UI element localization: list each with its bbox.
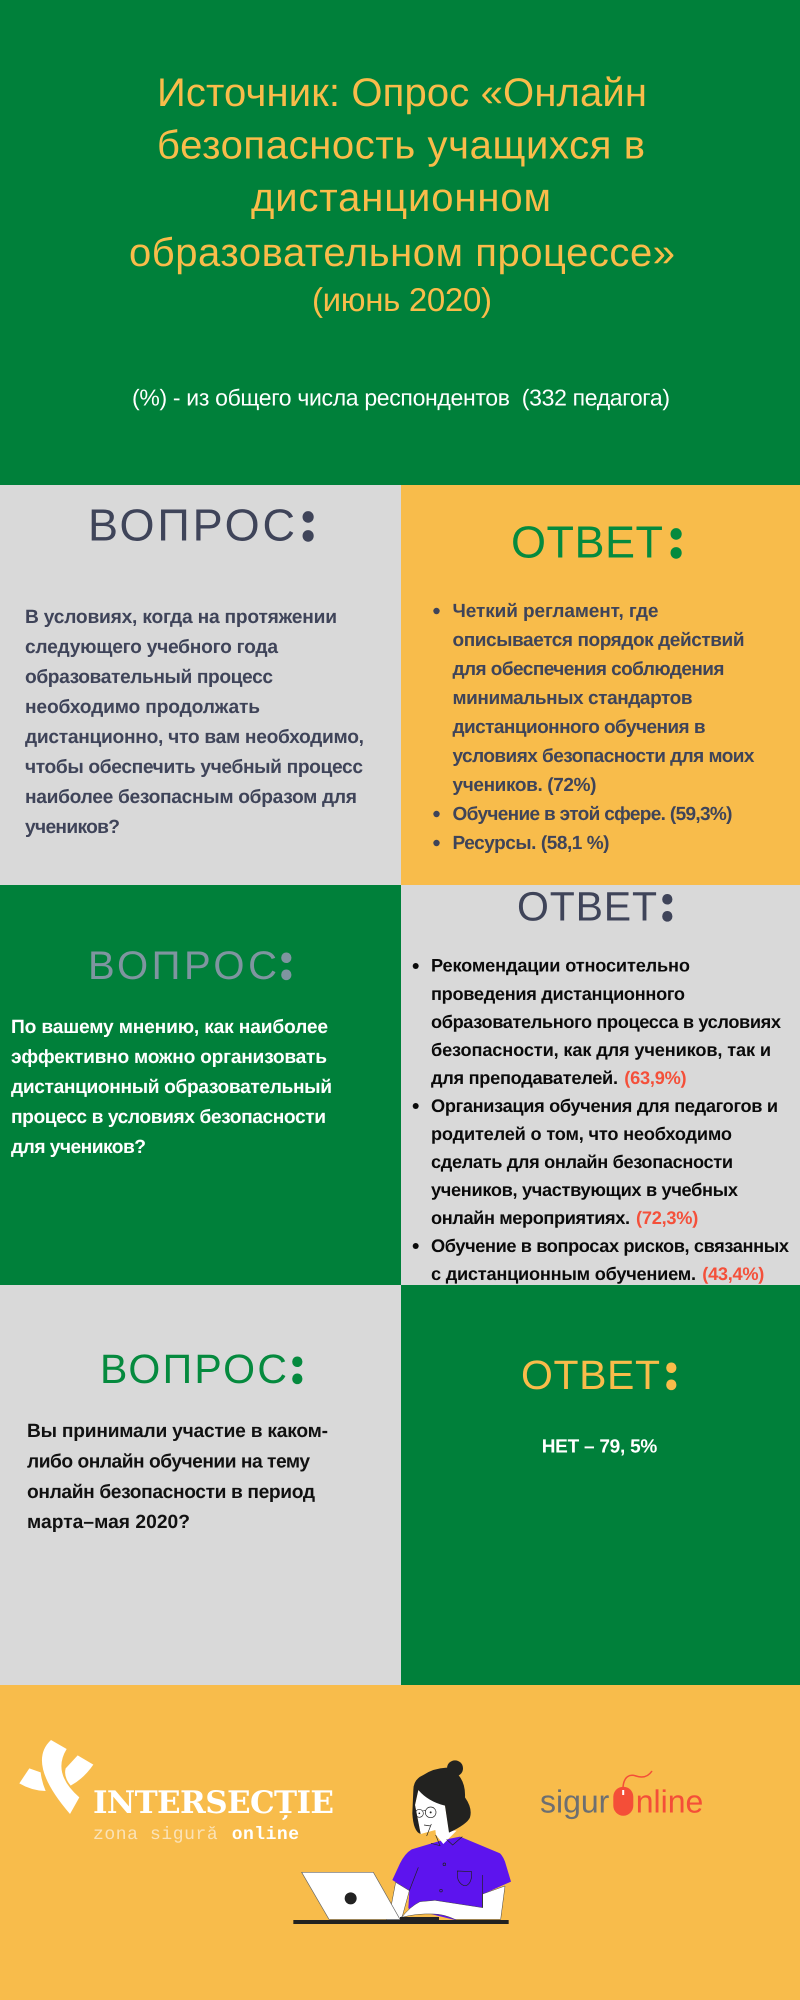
list: answer 1: минимальных стандартов — [452, 688, 692, 709]
list: answer 2: (72,3%) — [636, 1208, 698, 1228]
subtitle: respondents note: (%) - из общего числа респондентов (332 педагога) — [132, 384, 670, 410]
list: answer 2: учеников, участвующих в учебных — [431, 1180, 738, 1200]
title: (июнь 2020) — [312, 281, 492, 318]
panel: question 3 — [0, 1285, 401, 1685]
heading: question 1: : — [300, 483, 316, 555]
logo: Intersecție — [19, 1740, 334, 1845]
list: answer 2: Обучение в вопросах рисков, связанных — [431, 1236, 789, 1256]
list: answer 2: для преподавателей. — [431, 1068, 618, 1088]
heading: question 2 — [88, 926, 294, 992]
text: question 3 body: Вы принимали участие в каком- — [27, 1421, 328, 1442]
heading: question 1 — [88, 483, 316, 555]
list: answer 1: Ресурсы. (58,1 %) — [452, 833, 610, 854]
heading: answer 1: ОТВЕТ — [511, 517, 663, 568]
list: answer 1: Четкий регламент, где — [452, 601, 658, 622]
list: answer 2: Организация обучения для педагогов и — [431, 1096, 778, 1116]
text: question 3 body: онлайн безопасности в период — [27, 1482, 315, 1503]
shirt — [392, 1837, 511, 1920]
text: question 2 body — [11, 1017, 332, 1158]
text: question 1 body: В условиях, когда на протяжении — [25, 607, 337, 628]
glasses and details — [409, 1807, 482, 1908]
list: answer 1: условиях безопасности для моих — [452, 746, 755, 767]
text: question 3 body: либо онлайн обучении на тему — [27, 1452, 310, 1473]
text: question 1 body: учеников? — [25, 817, 120, 838]
text: question 2 body: эффективно можно организовать — [11, 1047, 327, 1068]
logo tagline: zona sigură — [93, 1825, 218, 1845]
text: question 2 body: По вашему мнению, как наиболее — [11, 1017, 328, 1038]
header panel — [0, 0, 800, 485]
heading: question 3 — [100, 1330, 305, 1396]
icon: Intersecție mark — [19, 1740, 93, 1814]
list: answer 1: описывается порядок действий — [452, 630, 744, 651]
list: answer 2: родителей о том, что необходимо — [431, 1124, 732, 1144]
text: answer 3 body: НЕТ – 79, 5% — [542, 1437, 657, 1458]
title: дистанционном — [251, 176, 551, 220]
table — [293, 1920, 509, 1924]
title — [129, 71, 675, 318]
text: question 2 body: для учеников? — [11, 1137, 146, 1158]
list: answer 2: онлайн мероприятиях. — [431, 1208, 630, 1228]
heading: answer 2 — [517, 868, 675, 933]
text: question 2 body: дистанционный образовательный — [11, 1077, 332, 1098]
title: Источник: Опрос «Онлайн — [157, 71, 647, 115]
logo tagline: online — [232, 1825, 299, 1845]
list: answer 2 — [413, 956, 789, 1284]
text: question 1 body: образовательный процесс — [25, 667, 273, 688]
laptop — [302, 1872, 439, 1920]
list: answer 2: (43,4%) — [702, 1264, 764, 1284]
logo: sigurOnline — [540, 1771, 703, 1820]
list: answer 1 — [433, 601, 755, 854]
heading: question 2: ВОПРОС — [88, 944, 277, 988]
logo text: sigur: sigur — [540, 1784, 610, 1820]
logo wordmark: INTERSECȚIE — [93, 1785, 334, 1821]
list: answer 2: с дистанционным обучением. — [431, 1264, 696, 1284]
list: answer 2: безопасности, как для учеников, так и — [431, 1040, 771, 1060]
title: образовательном процессе» — [129, 231, 675, 275]
text: question 1 body: наиболее безопасным образом для — [25, 787, 357, 808]
heading: answer 1 — [511, 500, 684, 572]
text: question 3 body — [27, 1421, 328, 1533]
panel: question 2 — [0, 885, 401, 1285]
heading: answer 2: ОТВЕТ — [517, 884, 657, 930]
text: question 3 body: марта–мая 2020? — [27, 1512, 190, 1533]
panel: answer 3 — [401, 1285, 800, 1685]
logo text: nline: nline — [636, 1784, 703, 1820]
heading: answer 3 — [521, 1336, 679, 1402]
list: answer 2: образовательного процесса в условиях — [431, 1012, 781, 1032]
text: question 1 body: чтобы обеспечить учебный процесс — [25, 757, 363, 778]
list: answer 1: дистанционного обучения в — [452, 717, 706, 738]
heading: answer 3: : — [664, 1336, 679, 1402]
list: answer 1: Обучение в этой сфере. (59,3%) — [452, 804, 732, 825]
hair — [412, 1760, 471, 1834]
list: answer 1: учеников. (72%) — [452, 775, 596, 796]
list: answer 2: Рекомендации относительно — [431, 956, 690, 976]
neck and face — [415, 1790, 457, 1844]
heading: answer 2: : — [660, 868, 675, 933]
arms — [387, 1882, 505, 1920]
text: question 2 body: процесс в условиях безопасности — [11, 1107, 326, 1128]
panel: answer 2 — [401, 868, 800, 1285]
heading: question 2: : — [279, 926, 294, 992]
heading: answer 3: ОТВЕТ — [521, 1352, 660, 1398]
icon: computer mouse — [613, 1771, 652, 1816]
text: question 1 body: следующего учебного года — [25, 637, 278, 658]
list: answer 1: для обеспечения соблюдения — [452, 659, 724, 680]
title: безопасность учащихся в — [157, 124, 645, 168]
logo tagline — [93, 1825, 299, 1845]
panel: question 1 — [0, 483, 401, 885]
text: question 1 body: необходимо продолжать — [25, 697, 260, 718]
text: question 1 body: дистанционно, что вам необходимо, — [25, 727, 364, 748]
heading: question 3: : — [290, 1330, 305, 1396]
panel: answer 1 — [401, 485, 800, 885]
list: answer 2: (63,9%) — [624, 1068, 687, 1088]
illustration: woman at laptop — [293, 1760, 511, 1924]
text: question 1 body — [25, 607, 364, 838]
heading: question 1: ВОПРОС — [88, 500, 295, 551]
list: answer 2: проведения дистанционного — [431, 984, 685, 1004]
list: answer 2: сделать для онлайн безопасности — [431, 1152, 733, 1172]
heading: answer 1: : — [668, 500, 684, 572]
heading: question 3: ВОПРОС — [100, 1346, 287, 1392]
panel: footer — [0, 1685, 800, 2000]
